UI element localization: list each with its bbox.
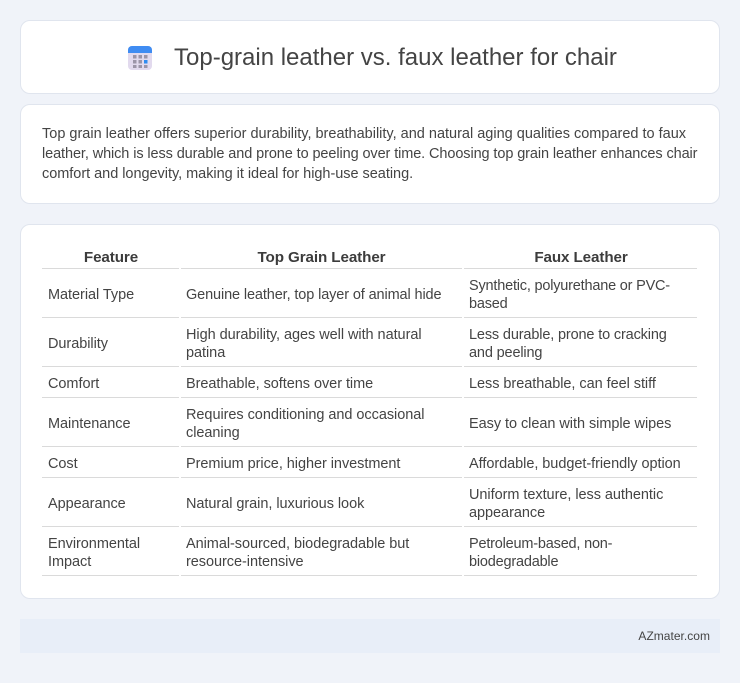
row: appearance: Uniform texture, less authentic — [469, 487, 663, 503]
row: comfort: Comfort — [48, 376, 99, 392]
footer credit: AZmater.com — [638, 629, 710, 643]
row: comfort: Less breathable, can feel stiff — [469, 376, 656, 392]
panel: title card — [20, 20, 720, 94]
summary text — [42, 126, 698, 182]
row: material type: Genuine leather, top layer of animal hide — [186, 287, 441, 303]
row: environmental impact — [48, 536, 612, 570]
row: durability: patina — [186, 345, 225, 361]
row: environmental impact: Impact — [48, 554, 91, 570]
panel: comparison table — [20, 224, 720, 599]
icon: calendar grid — [128, 46, 152, 70]
row: durability: Less durable, prone to cracking — [469, 327, 667, 343]
row: cost: Premium price, higher investment — [186, 456, 400, 472]
footer bar — [20, 619, 720, 653]
comparison table — [42, 249, 697, 576]
row: material type: Synthetic, polyurethane or PVC- — [469, 278, 670, 294]
row: durability: Durability — [48, 336, 108, 352]
row: durability: and peeling — [469, 345, 542, 361]
row: maintenance: Maintenance — [48, 416, 130, 432]
row: maintenance: Requires conditioning and occasional — [186, 407, 424, 423]
table header: Top Grain Leather — [258, 249, 385, 266]
panel: summary — [20, 104, 720, 204]
row: maintenance — [48, 407, 671, 441]
title: Top-grain leather vs. faux leather for chair — [174, 44, 617, 71]
row: material type — [48, 278, 670, 312]
summary text: Top grain leather offers superior durability, breathability, and natural aging qualities compared to faux — [42, 126, 686, 142]
table header: Feature — [84, 249, 138, 266]
row: environmental impact: resource-intensive — [186, 554, 304, 570]
row: environmental impact: Environmental — [48, 536, 140, 552]
row: cost — [48, 456, 681, 472]
row: appearance: appearance — [469, 505, 545, 521]
row: environmental impact: biodegradable — [469, 554, 558, 570]
row: appearance: Appearance — [48, 496, 126, 512]
row: durability — [48, 327, 667, 361]
row: material type: based — [469, 296, 508, 312]
row: comfort — [48, 376, 656, 392]
table header — [84, 249, 628, 266]
row: appearance: Natural grain, luxurious look — [186, 496, 364, 512]
row: comfort: Breathable, softens over time — [186, 376, 373, 392]
row: environmental impact: Animal-sourced, biodegradable but — [186, 536, 409, 552]
row: cost: Affordable, budget-friendly option — [469, 456, 681, 472]
row: environmental impact: Petroleum-based, non- — [469, 536, 612, 552]
table header: Faux Leather — [534, 249, 628, 266]
summary text: leather, which is less durable and prone to peeling over time. Choosing top grain leather enhances chair — [42, 146, 697, 162]
row: appearance — [48, 487, 663, 521]
row: maintenance: Easy to clean with simple wipes — [469, 416, 671, 432]
summary text: comfort and longevity, making it ideal for high-use seating. — [42, 166, 413, 182]
row: cost: Cost — [48, 456, 78, 472]
row: material type: Material Type — [48, 287, 134, 303]
row: maintenance: cleaning — [186, 425, 240, 441]
row: durability: High durability, ages well with natural — [186, 327, 422, 343]
